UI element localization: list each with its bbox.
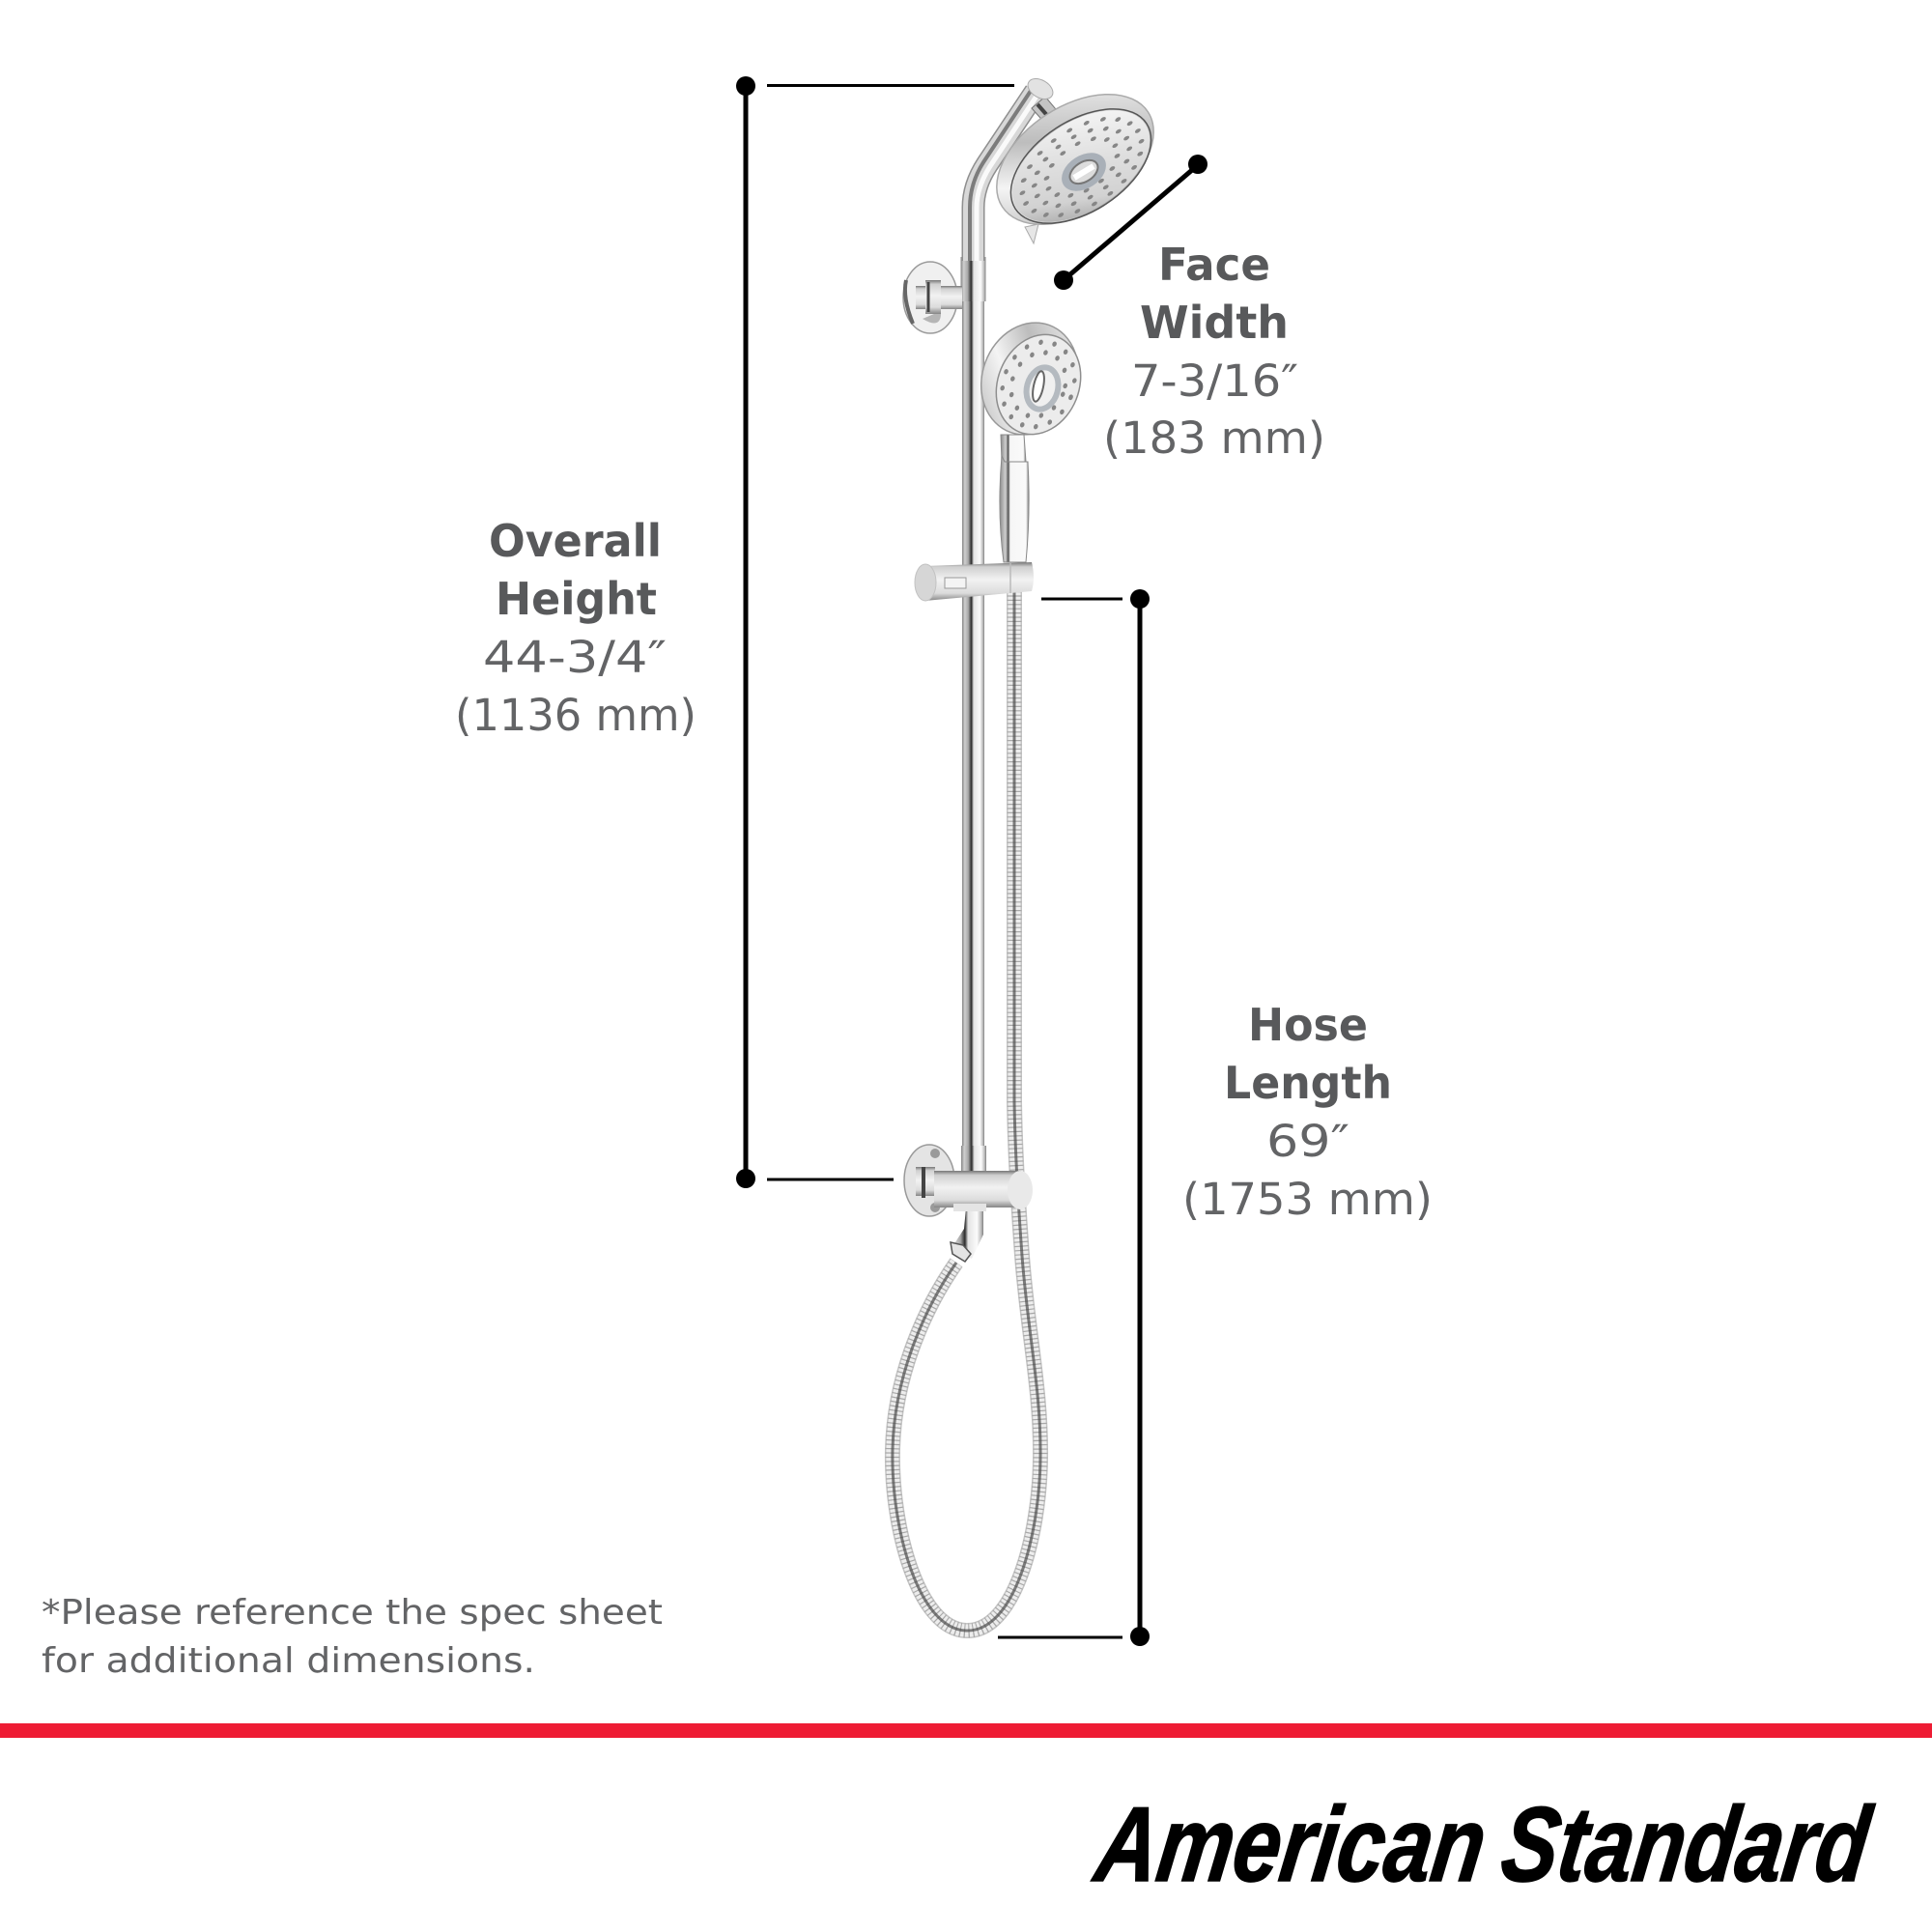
slider bracket (915, 562, 1034, 601)
lower wall mount and outlet (904, 1145, 1033, 1262)
flexible hose (893, 591, 1040, 1631)
label: hose length: Hose (1248, 999, 1368, 1051)
hand shower (966, 309, 1095, 562)
logo: American Standard: American (1087, 1785, 1493, 1904)
label: face width: (183 mm) (1103, 412, 1325, 464)
label: overall height: Height (496, 573, 657, 625)
arm cap and neck (1024, 74, 1061, 126)
label: face width (1103, 239, 1325, 464)
red divider bar (0, 1723, 1932, 1738)
label: face width: Width (1140, 297, 1289, 349)
footnote: for additional dimensions. (42, 1641, 535, 1681)
shower system illustration (893, 68, 1177, 1631)
logo: American Standard (1087, 1785, 1879, 1904)
label: overall height: 44-3/4″ (483, 632, 667, 683)
upper wall mount (903, 262, 962, 333)
label: face width: Face (1158, 239, 1270, 291)
dimension line: hose length (998, 589, 1150, 1646)
dimension line: face width (1054, 155, 1208, 290)
label: overall height: (1136 mm) (455, 690, 696, 741)
label: hose length: (1753 mm) (1182, 1174, 1433, 1225)
shower arm (970, 91, 1037, 261)
main rail (960, 253, 985, 1151)
footnote: *Please reference the spec sheet (42, 1593, 663, 1633)
dimension line: overall height (736, 76, 1014, 1188)
label: hose length (1182, 999, 1433, 1225)
label: hose length: Length (1224, 1057, 1392, 1109)
rain shower head (974, 68, 1177, 251)
footnote (42, 1593, 663, 1681)
label: face width: 7-3/16″ (1131, 355, 1298, 407)
label: hose length: 69″ (1266, 1116, 1350, 1167)
label: overall height (455, 515, 696, 741)
label: overall height: Overall (489, 515, 662, 567)
